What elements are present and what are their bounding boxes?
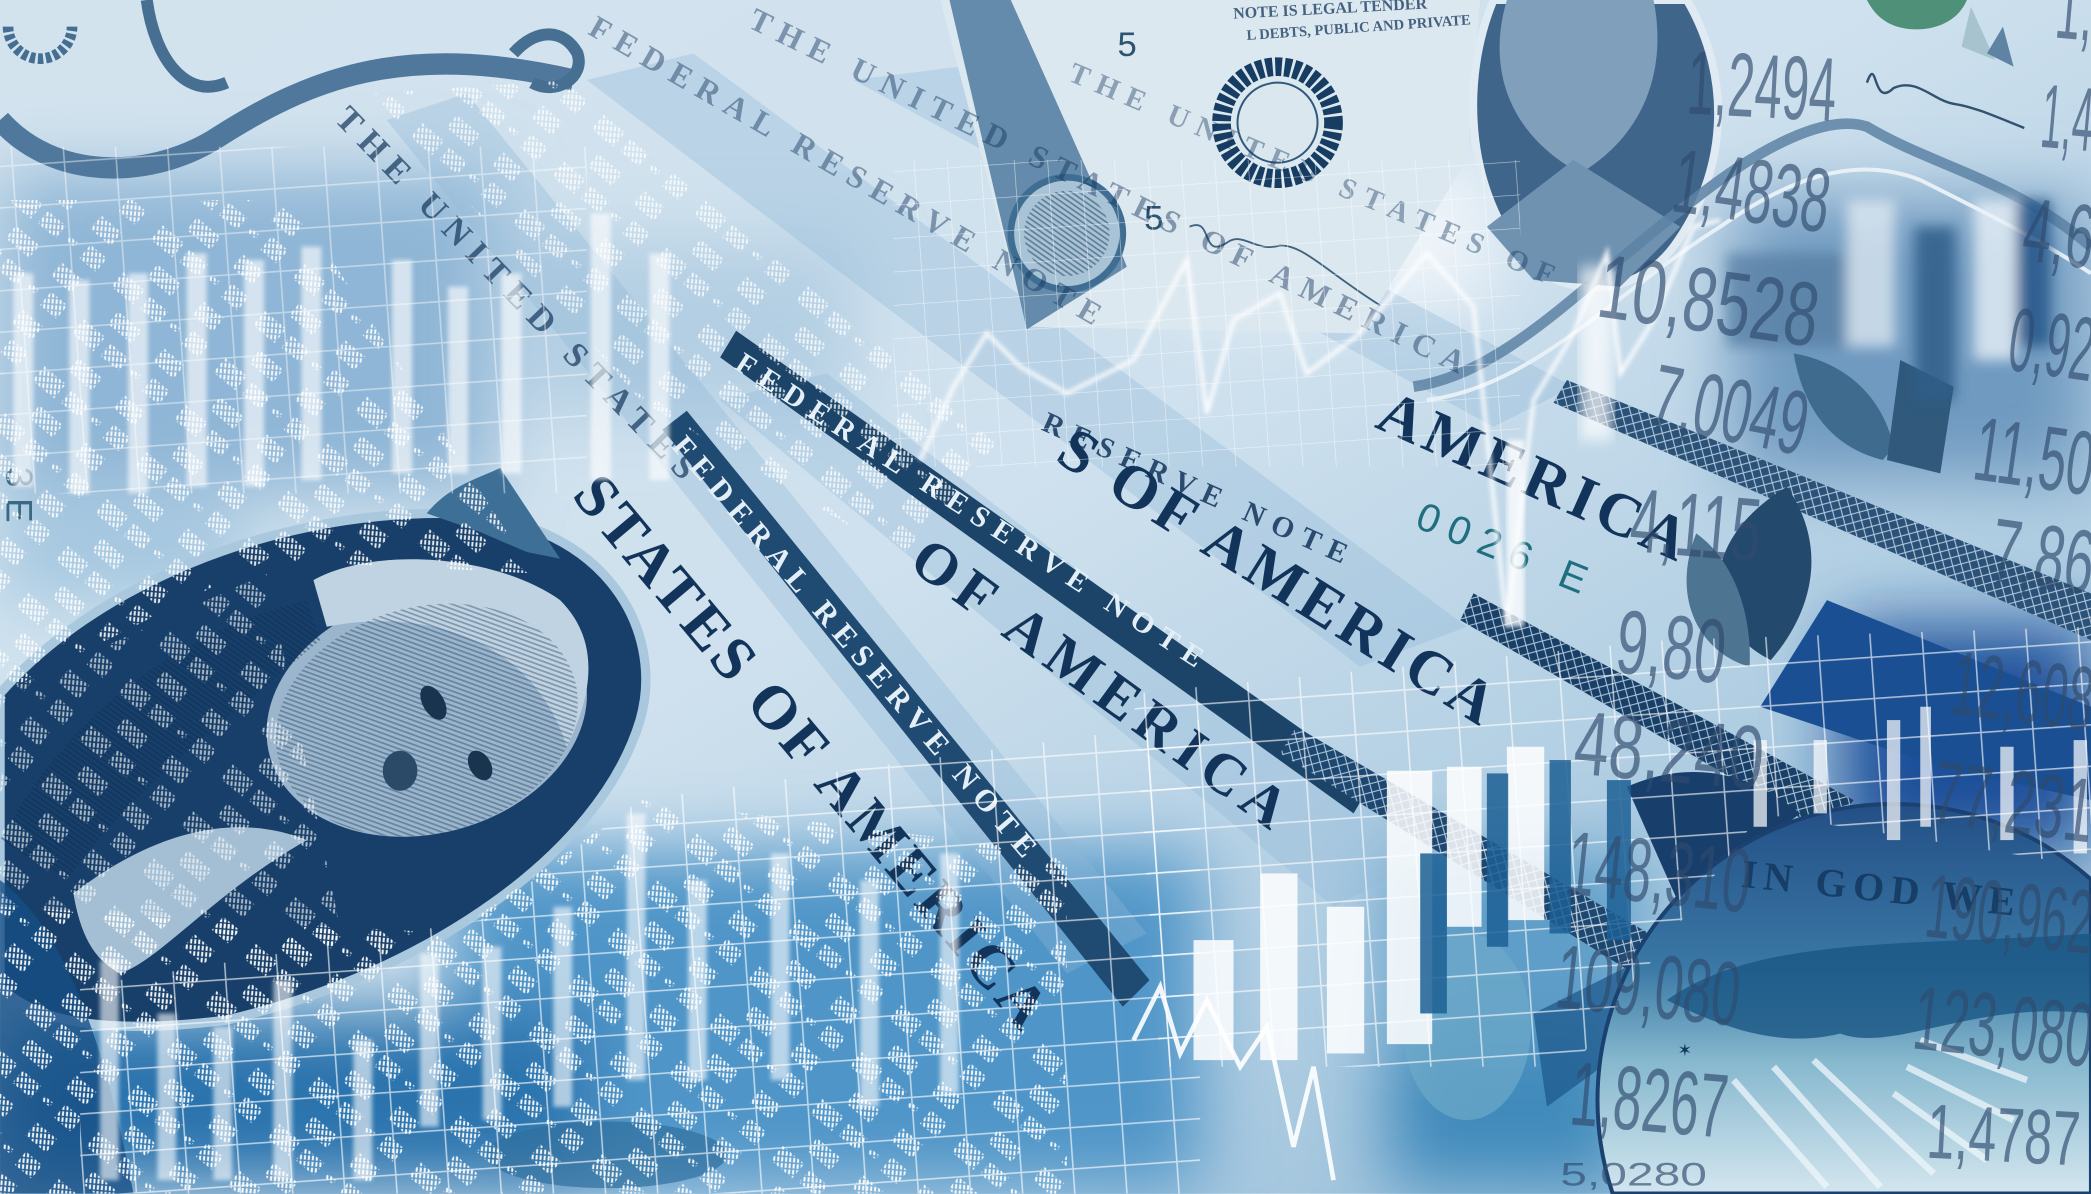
digital ticker digits overlay: [0, 80, 1067, 1193]
fan of note edges: upper text rows: THE UNITED STATES: [328, 99, 711, 494]
ornament seal: [8, 27, 72, 59]
portrait collar: [1487, 160, 1680, 287]
nose: [383, 751, 417, 791]
band text: FEDERAL RESERVE NOTE: [665, 429, 1049, 870]
ticker numbers on right: 109,080: [1551, 926, 1745, 1046]
bright vertical spike right: [1580, 267, 1612, 440]
signature: [1190, 225, 1380, 305]
bar chart: centre bright bars: [1194, 747, 1544, 1060]
ticker numbers on right: 10,8528: [1592, 236, 1825, 367]
ticker numbers on right: 48,240: [1570, 693, 1768, 810]
bright vertical spike: [1507, 440, 1524, 627]
ticker numbers on right: 5,0280: [1560, 1156, 1707, 1192]
portrait face: [1500, 0, 1657, 173]
dark wedge: [1534, 960, 1640, 1107]
digits upper streak: [373, 80, 1013, 560]
leaf oval: [1403, 933, 1531, 1120]
icon: green treasury seal corner: [1867, 0, 2014, 67]
icon: lower centre laurel: [1403, 772, 1800, 1120]
ornament upper left banknote: [0, 0, 579, 168]
coin: silver dollar: [1597, 804, 2091, 1193]
second digit: 5: [1144, 199, 1163, 237]
note band: long lace stripe centre: [1280, 727, 1660, 973]
head: [239, 555, 615, 871]
treasury signature: [1867, 74, 2024, 128]
bar chart: upper left white bars: [13, 213, 669, 493]
portrait: upper right engraving: [1473, 0, 1718, 288]
coat collar: [73, 827, 307, 973]
ornate border arc second line: [1427, 169, 2091, 400]
ornament corner: [427, 468, 560, 559]
icon: laurel ornament on right: [1687, 487, 2091, 800]
triangle marker second: [1987, 27, 2014, 67]
digits lower left: [0, 800, 1067, 1193]
chart grid: upper left: [0, 147, 587, 493]
coin eagle wings: [1734, 1040, 2027, 1187]
leaf: [1687, 533, 1750, 667]
ticker numbers on right: [1551, 0, 2091, 1192]
note ornament column: [949, 0, 1127, 329]
serial digit: 5: [1118, 26, 1137, 64]
ticker numbers on right: 1,2494: [1685, 32, 1839, 141]
coat shadow: [0, 600, 320, 880]
bar chart: right blurred bars: [1727, 200, 2051, 400]
large text: AMERICA top right: AMERICA: [1368, 377, 1704, 577]
ticker numbers on right: 9,80: [1611, 592, 1731, 703]
line chart: market price upper: [920, 220, 1720, 627]
inner seal hatching: [1024, 191, 1110, 276]
large text: STATES OF AMERICA left: STATES OF AMERICA: [560, 461, 1065, 1044]
serial numerals on note: 0026 E: [1410, 494, 1604, 607]
seal inner ring: [1238, 83, 1318, 163]
note band: upper right lace stripe: [1554, 380, 2091, 640]
coin rim star: ✶: [1678, 1041, 1692, 1061]
bar chart: lower left white bars: [100, 813, 959, 1180]
dark leaf plate: [1887, 360, 1954, 473]
hair: [313, 559, 588, 747]
bar chart: right lower bars: [1754, 707, 2087, 853]
fan of note edges: upper text rows: [328, 1, 1568, 574]
icon: federal reserve seal on note: [1011, 177, 1123, 289]
band lace: [1460, 593, 1854, 833]
ticker numbers on right: 7,0049: [1643, 346, 1817, 475]
lower left dark note corner: [0, 880, 133, 1193]
lower note seal: [487, 1121, 727, 1188]
text row: RESERVE NOTE: [1037, 407, 1361, 574]
coin head profile: [1667, 933, 2091, 1039]
ticker numbers on right: 1,8267: [1566, 1043, 1732, 1158]
portrait: washington oval: [0, 468, 646, 1026]
triangle marker: [1962, 7, 1995, 60]
bar chart: centre dark bars: [1420, 760, 1631, 1013]
eye lower: [463, 746, 497, 785]
band lace: [1554, 380, 2091, 640]
chart grid: lower centre: [1134, 627, 2091, 1067]
digits portrait: [0, 573, 347, 960]
large text: OF AMERICA centre: OF AMERICA: [899, 525, 1307, 846]
fan of note tones: [387, 53, 1574, 973]
line chart: market price lower: [1134, 987, 1334, 1180]
chart grid: lower left: [80, 720, 1200, 1193]
chart grid: fine upper middle: [893, 160, 1520, 467]
note band: lace stripe right: [1460, 593, 1854, 833]
icon: treasury seal: [1222, 67, 1334, 179]
note legal tender second line: L DEBTS, PUBLIC AND PRIVATE: [1246, 12, 1471, 44]
ticker numbers on right: 4,115: [1626, 470, 1765, 582]
eye upper: [415, 681, 452, 724]
shield: [1760, 600, 2091, 800]
ornate border arc upper right: [1414, 124, 2091, 387]
band text: FEDERAL RESERVE NOTE: [730, 347, 1217, 679]
large text: OF AMERICA right: S OF AMERICA: [1046, 414, 1513, 741]
face shading: [249, 571, 604, 869]
icon: upper right leaf cluster: [1794, 353, 1954, 473]
coin lettering: IN GOD WE: [1739, 851, 2024, 925]
band lace: [1280, 727, 1660, 973]
ornament scroll: [147, 0, 579, 87]
ticker numbers on right: 148,310: [1562, 813, 1756, 933]
note band: first federal reserve note stripe: [663, 411, 1150, 1007]
text row: FEDERAL RESERVE NOTE: [583, 8, 1116, 337]
top banknote with serial 5: [940, 0, 1480, 333]
ticker numbers on right: 1,4838: [1667, 130, 1837, 252]
text row: THE UNITED STATES OF AMERICA: [744, 1, 1480, 384]
note band: second federal reserve note stripe: [720, 331, 1374, 813]
text row: THE UNITED STATES OF: [1064, 57, 1568, 295]
